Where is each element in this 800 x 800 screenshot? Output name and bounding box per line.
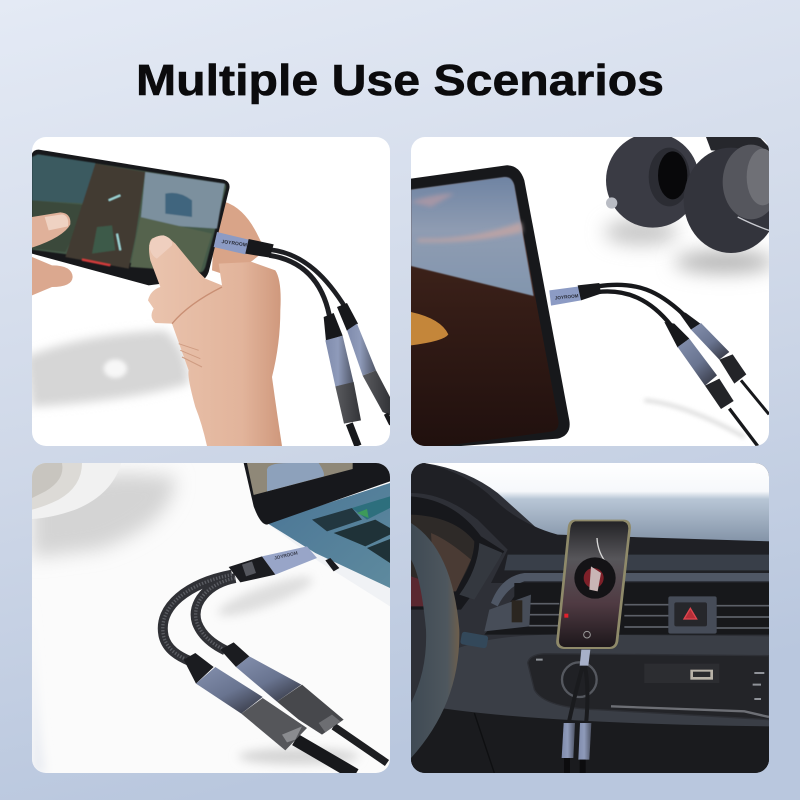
- left thumb: [32, 212, 70, 248]
- panel: tablet and headphones: [411, 133, 779, 446]
- left hand fingers: [32, 257, 73, 295]
- panel: laptop connection: [32, 463, 390, 775]
- lower dash and head unit: [411, 635, 769, 773]
- instrument cluster: [411, 496, 504, 610]
- icon: hazard button: [668, 596, 717, 634]
- adapter cable: JOYROOM: [274, 550, 298, 561]
- icon: laptop: [244, 463, 390, 606]
- back fingers of right hand: [212, 202, 261, 273]
- adapter cable: JOYROOM: [555, 293, 579, 301]
- tablet: [411, 165, 570, 446]
- vents: [484, 583, 769, 635]
- icon: plate: [32, 463, 121, 519]
- adapter cable: [562, 650, 597, 773]
- adapter cables: [214, 232, 391, 446]
- game screen: [32, 154, 226, 273]
- panel: phone gaming: [25, 137, 391, 446]
- adapter cable: [163, 546, 387, 775]
- icon: headphones: [606, 133, 779, 253]
- steering wheel: [411, 523, 489, 758]
- right hand: [148, 236, 282, 446]
- adapter cables: JOYROOM: [221, 239, 247, 249]
- windshield and dash top: [424, 463, 769, 541]
- title: Multiple Use Scenarios: [136, 56, 664, 105]
- phone: [32, 150, 230, 285]
- icon: phone in mount: [556, 520, 631, 649]
- adapter cable: [549, 283, 769, 446]
- panel: car dashboard: [411, 463, 769, 773]
